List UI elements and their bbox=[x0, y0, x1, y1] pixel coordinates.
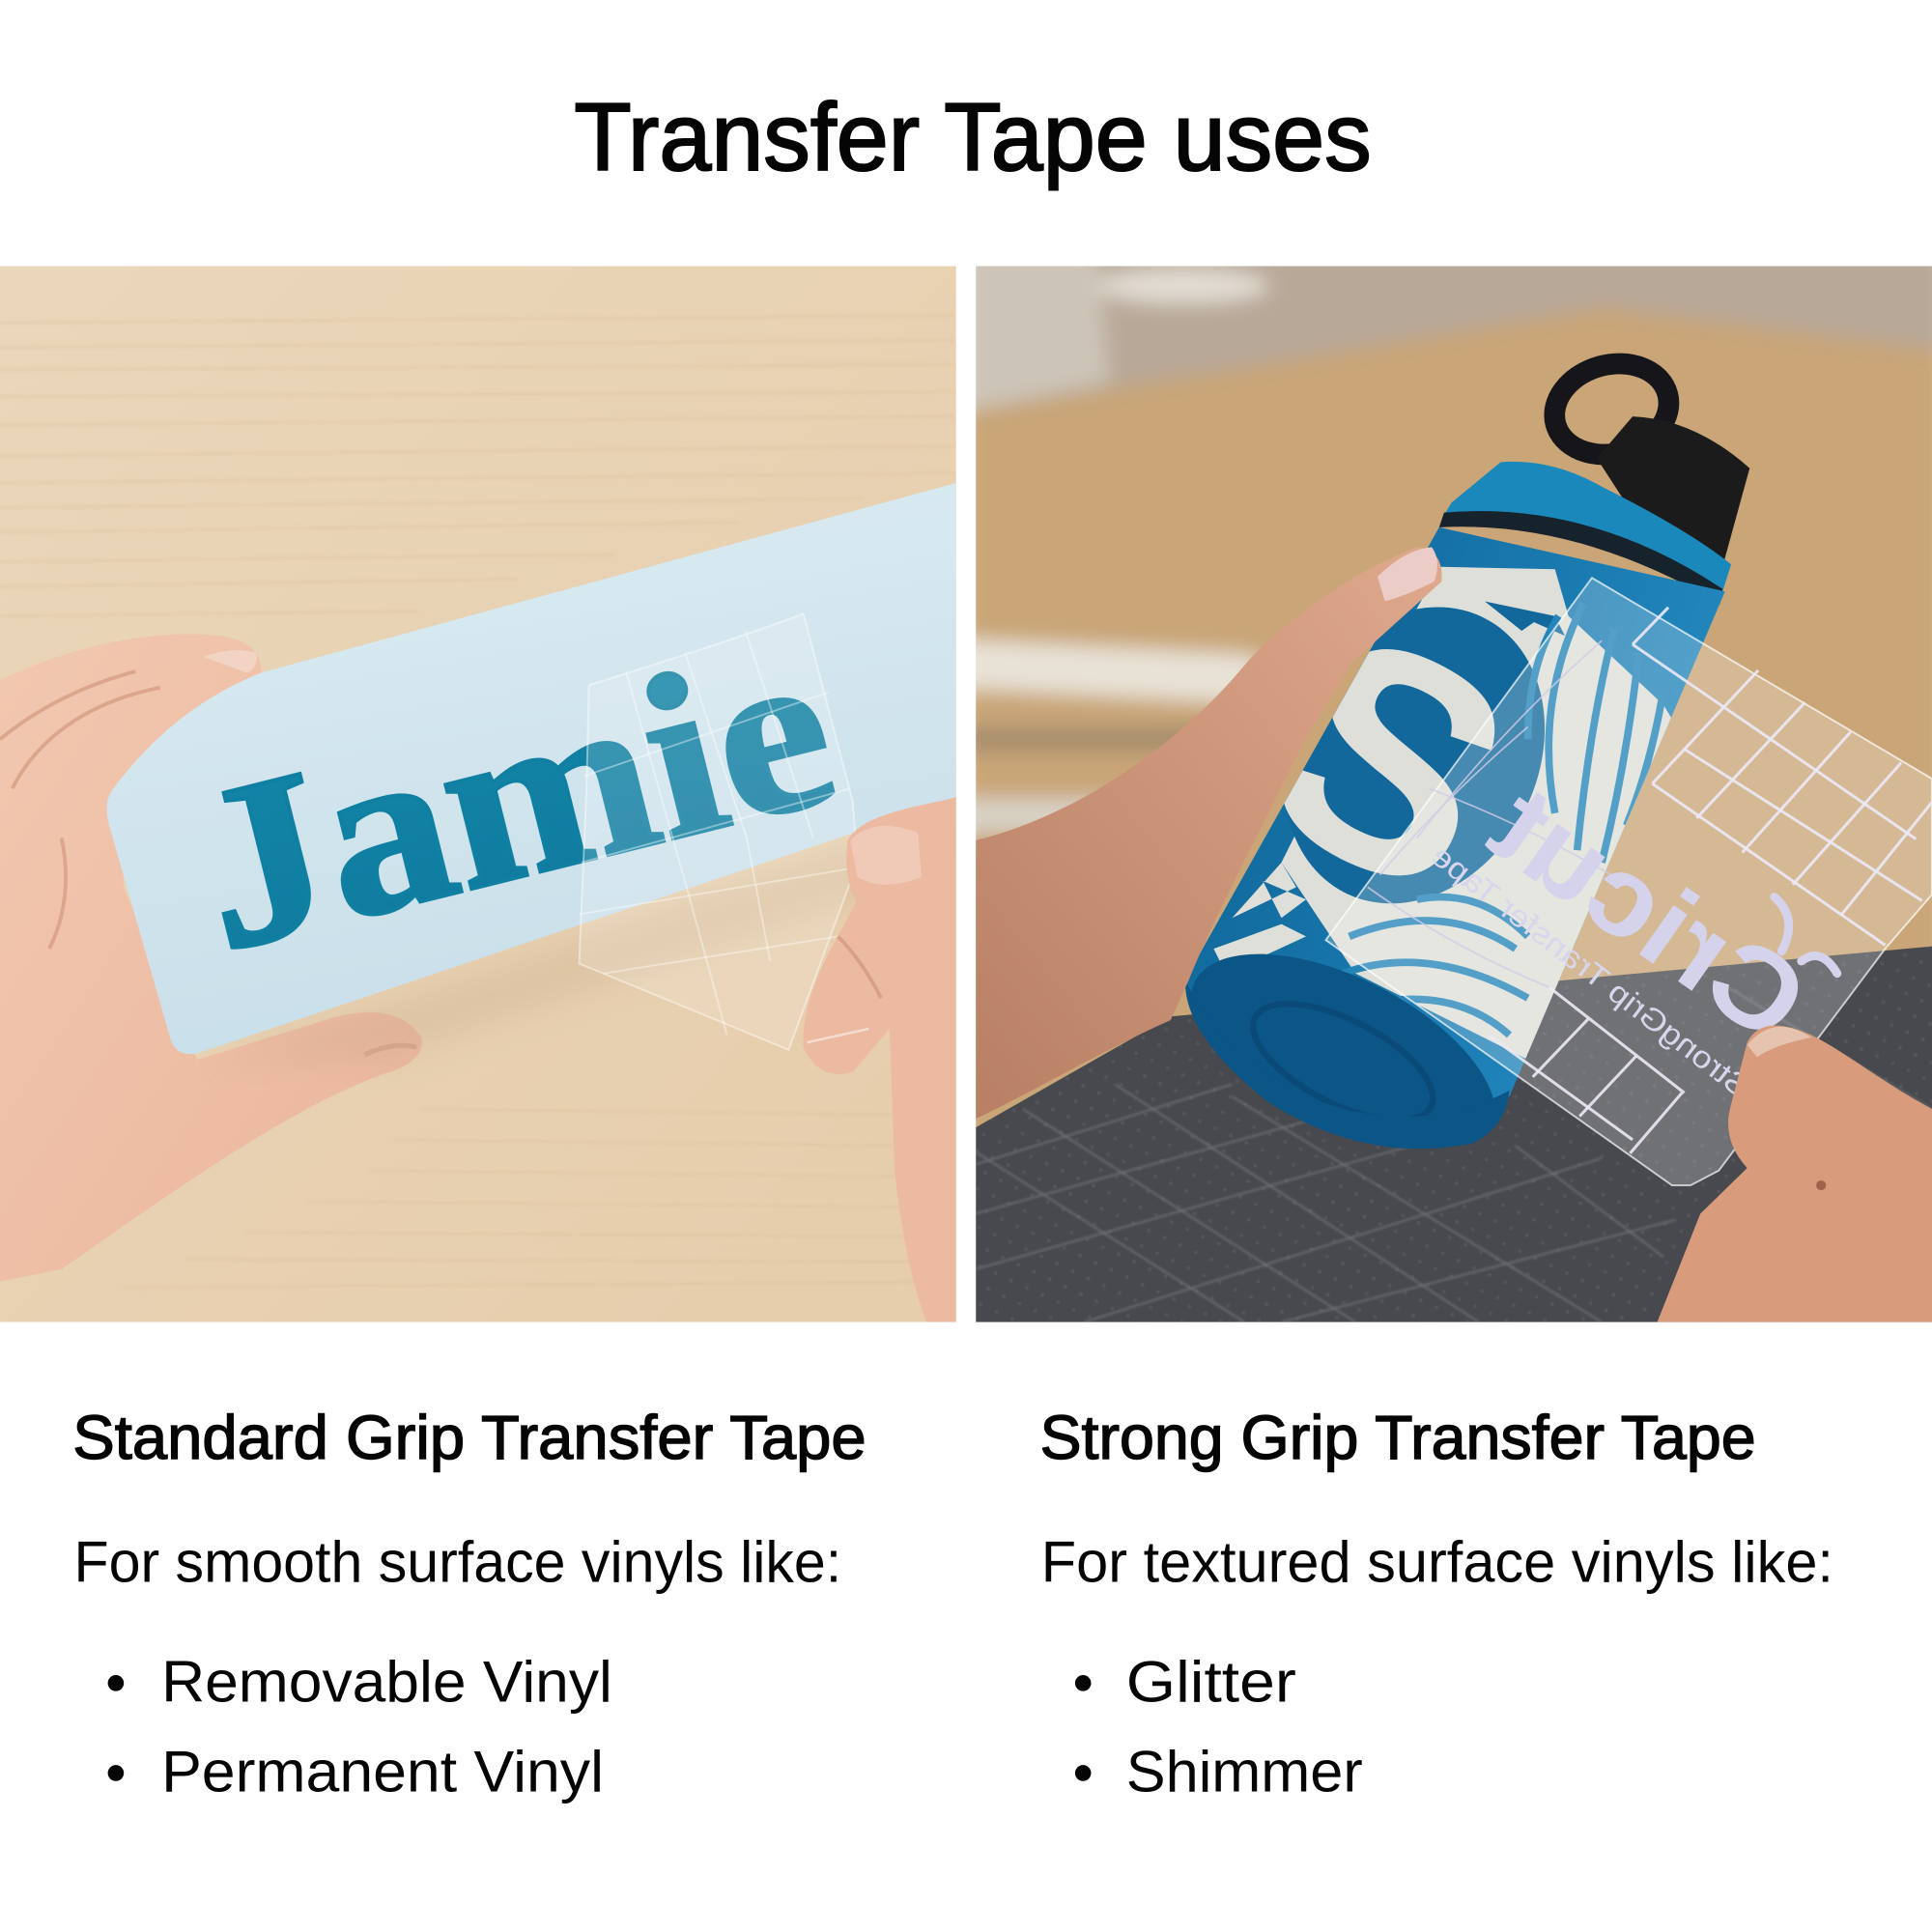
description: smooth surface: For smooth surface vinyls like: bbox=[74, 1530, 841, 1595]
feather stripes bbox=[1343, 604, 1663, 1035]
left column copy bbox=[72, 1403, 867, 1804]
description: textured surface: For textured surface vinyls like: bbox=[1041, 1530, 1833, 1595]
transfer tape sheet bbox=[1325, 578, 1932, 1185]
letter S: S bbox=[1221, 561, 1560, 961]
list item: Glitter bbox=[1126, 1649, 1296, 1714]
holding hand left bbox=[976, 547, 1442, 1119]
cutting mat bbox=[976, 947, 1932, 1322]
panel: strong grip photo bbox=[960, 246, 1932, 1331]
bullet bbox=[108, 1675, 124, 1691]
lower left silver stripes bbox=[1213, 863, 1306, 960]
blue bottle collar bbox=[1444, 462, 1731, 591]
panel: standard grip photo bbox=[0, 267, 956, 1322]
heading: strong grip: Strong Grip Transfer Tape bbox=[1040, 1403, 1756, 1472]
blue ring behind letter bbox=[1285, 607, 1545, 904]
mirrored Cricut wordmark: Cricut bbox=[1469, 761, 1830, 1065]
bottle base edge bbox=[1185, 980, 1509, 1149]
bottle body with graphic bbox=[1187, 527, 1725, 1117]
bullet bbox=[1075, 1765, 1091, 1781]
title: Transfer Tape uses bbox=[574, 84, 1372, 191]
heading: standard grip: Standard Grip Transfer Tape bbox=[72, 1403, 867, 1472]
holding hand right bbox=[1658, 1026, 1932, 1322]
blurred room background bbox=[960, 246, 1932, 1331]
list item: Permanent Vinyl bbox=[161, 1740, 604, 1804]
bullet bbox=[1075, 1675, 1091, 1691]
wood table background bbox=[0, 267, 956, 1322]
dark bottle base bbox=[1192, 954, 1493, 1117]
transfer tape sheet bbox=[579, 613, 858, 1050]
mirrored product name: StrongGrip Transfer Tape bbox=[1425, 838, 1757, 1104]
black bottle lid ring bbox=[1545, 352, 1679, 467]
right hand bbox=[803, 797, 956, 1322]
black bottle lid bbox=[1597, 416, 1749, 567]
bottle shadow bbox=[309, 867, 852, 1051]
list item: Shimmer bbox=[1126, 1740, 1363, 1804]
light blue bottle bbox=[107, 483, 956, 1054]
wordmark antennae bbox=[1775, 897, 1837, 974]
list item: Removable Vinyl bbox=[161, 1649, 612, 1714]
silver artwork bbox=[1282, 567, 1685, 1060]
left hand bbox=[0, 634, 422, 1282]
bullet bbox=[108, 1765, 124, 1781]
Jamie lettering: Jamie bbox=[172, 595, 856, 1001]
black collar gap bbox=[1439, 511, 1722, 604]
right column copy bbox=[1040, 1403, 1833, 1804]
